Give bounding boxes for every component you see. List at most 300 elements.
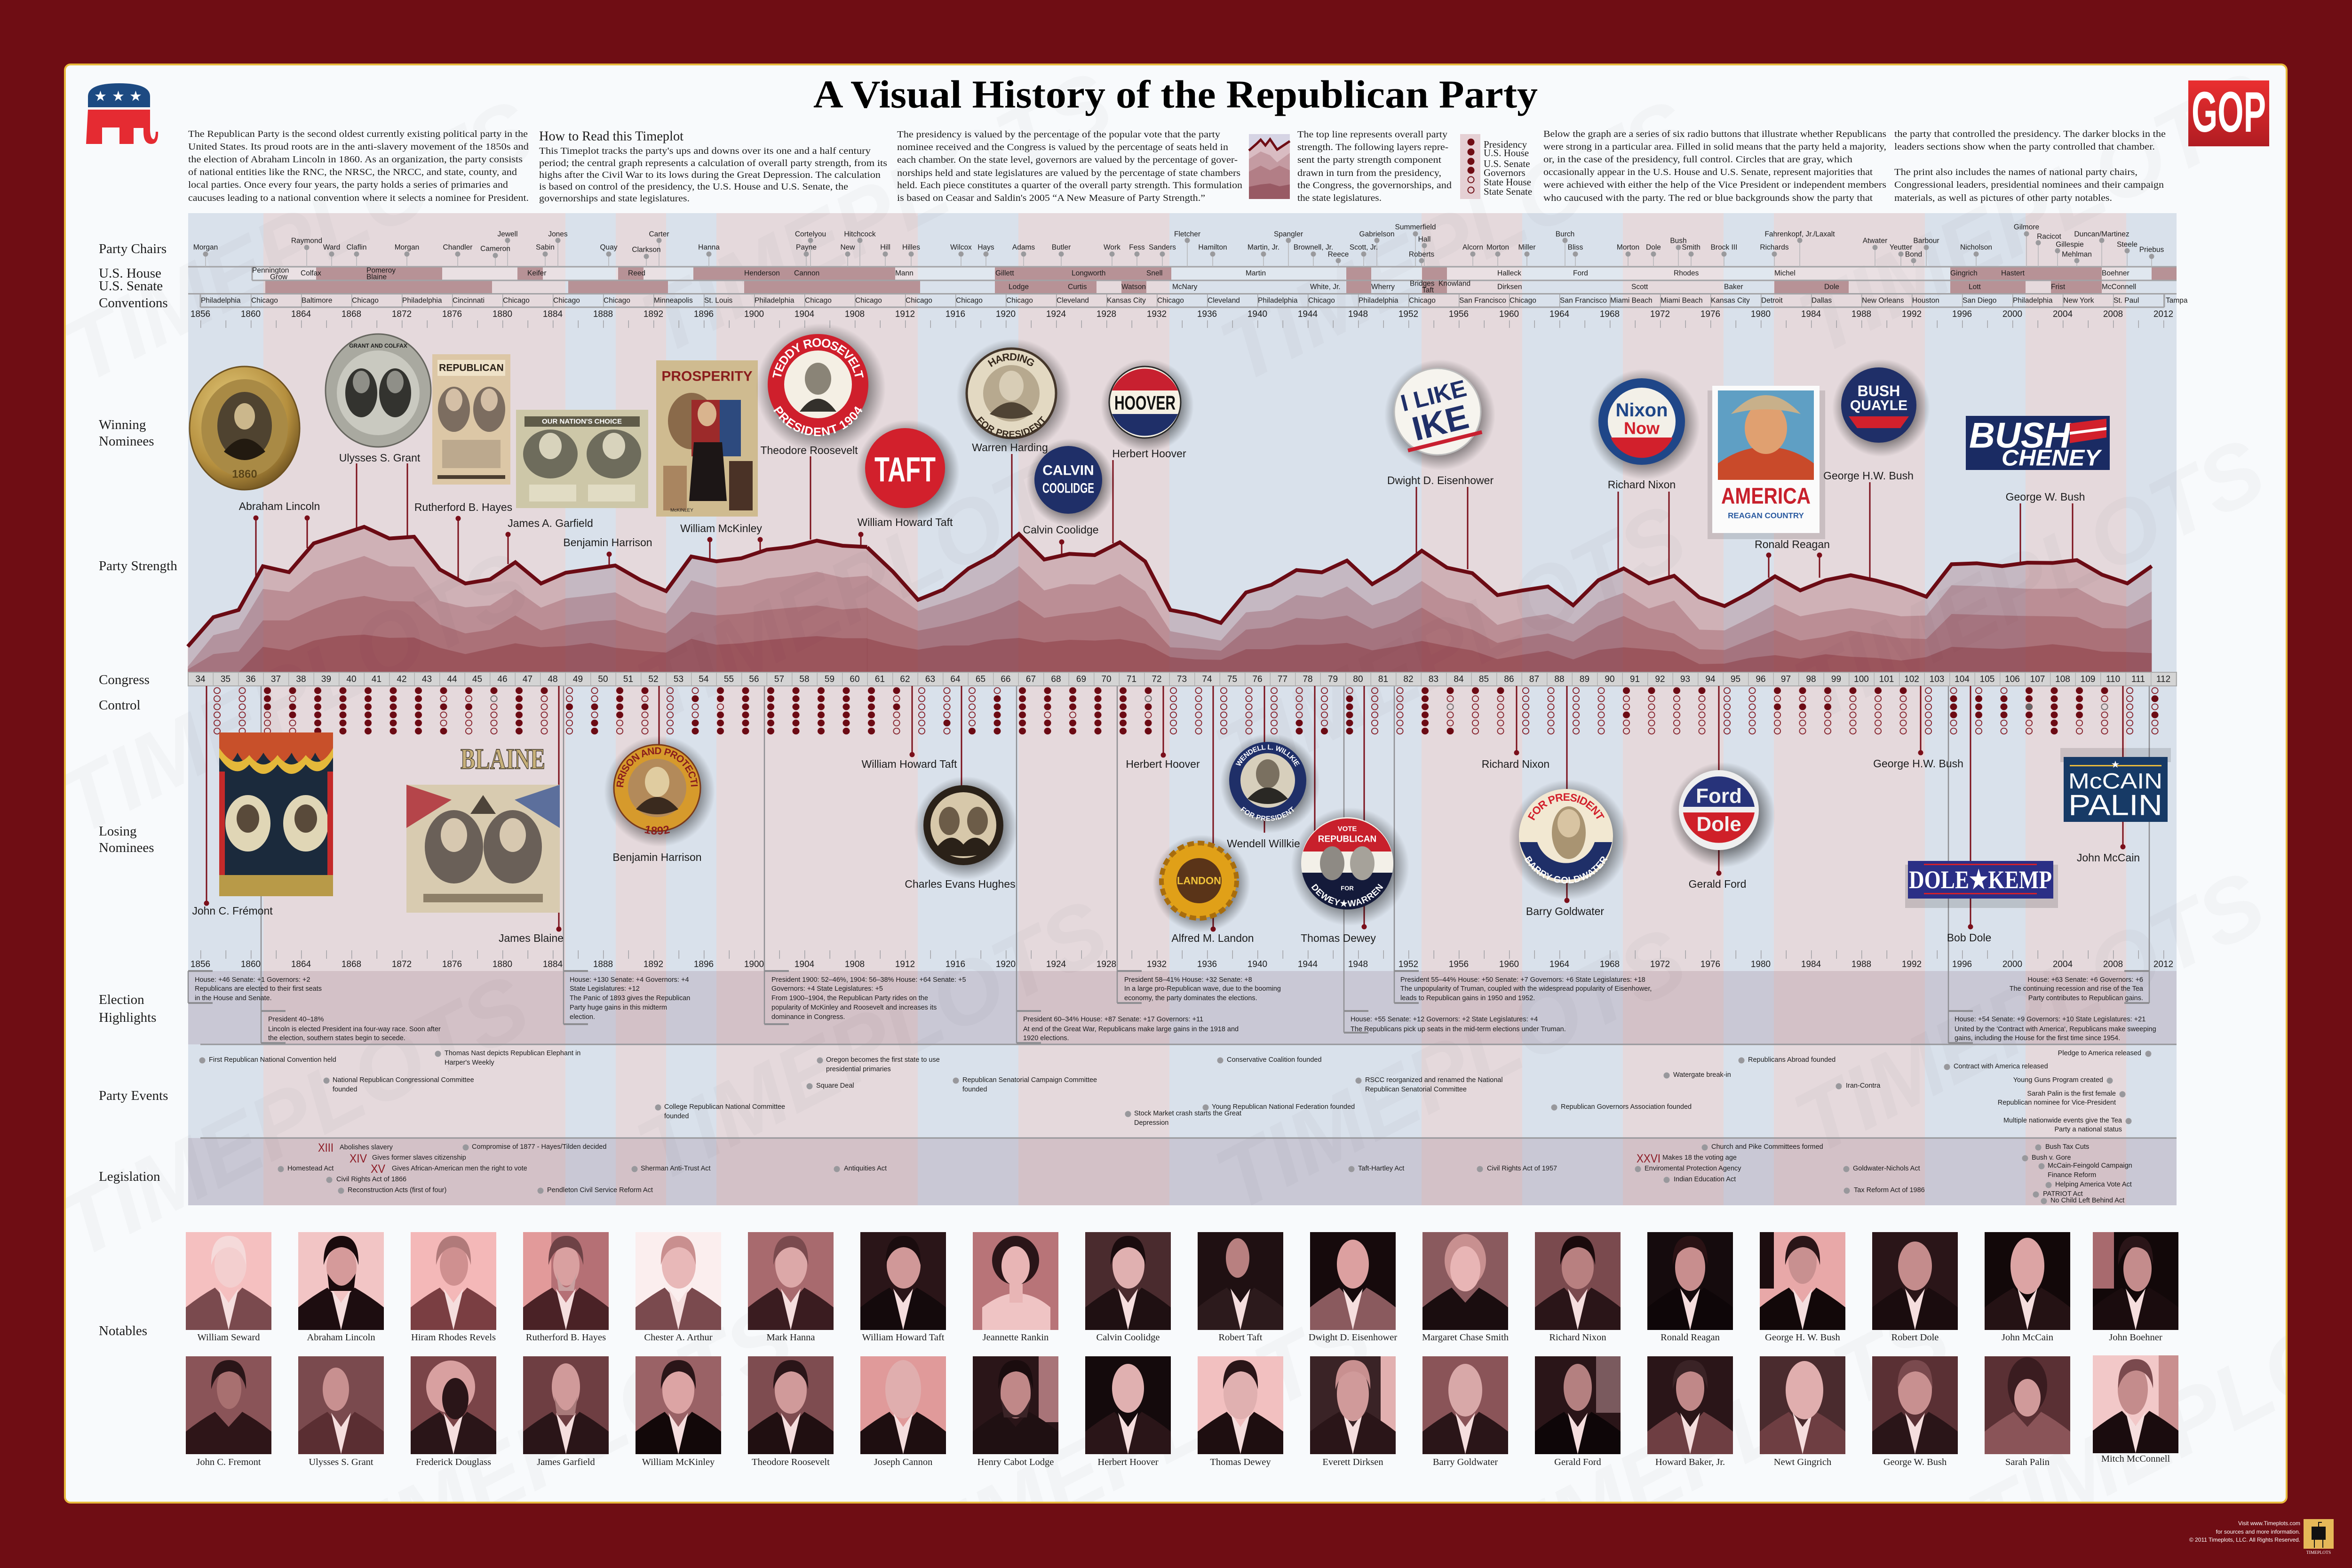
notable: James Garfield bbox=[523, 1356, 609, 1467]
election highlights text: President 55–44% House: +50 Senate: +7 Governors: +6 State Legislatures: +18 bbox=[1400, 976, 1645, 984]
bottom year axis: 1968 bbox=[1600, 960, 1620, 969]
notable: Sarah Palin bbox=[1985, 1356, 2070, 1467]
Bush Cheney banner bbox=[1966, 416, 2110, 470]
legislation text: XIV bbox=[350, 1152, 367, 1165]
party chairs names bbox=[193, 223, 2164, 259]
label: Hoover: Herbert Hoover bbox=[1112, 447, 1186, 460]
notable: Mark Hanna: Mark Hanna bbox=[766, 1332, 815, 1343]
Bush Cheney banner: BUSH bbox=[1969, 416, 2071, 455]
text block: radio buttons: were strong in a particular area. Filled in solid means that the party held a majority, bbox=[1543, 142, 1886, 152]
election highlights text: House: +55 Senate: +12 Governors: +2 State Legislatures: +4 bbox=[1351, 1016, 1538, 1023]
text block: backgrounds and print: leaders sections show when the party controlled that chamber. bbox=[1894, 142, 2155, 152]
Bush Quayle button bbox=[1832, 359, 1930, 457]
bottom year axis: 1912 bbox=[895, 960, 915, 969]
legislation text: Antiquities Act bbox=[844, 1165, 887, 1172]
party chairs names: Work bbox=[1104, 244, 1120, 251]
house and senate leader names: Ford bbox=[1573, 269, 1588, 278]
house and senate leader names: Pennington bbox=[252, 266, 289, 275]
losing nominee stems bbox=[207, 686, 2123, 929]
convention cities: Philadelphia bbox=[2013, 296, 2053, 305]
congress number strip: 86 bbox=[1504, 675, 1514, 684]
convention cities: San Francisco bbox=[1560, 296, 1607, 305]
Landon sunflower bbox=[1152, 835, 1250, 932]
election highlights text: United by the 'Contract with America', Republicans make sweeping bbox=[1955, 1026, 2156, 1033]
notable: George W. Bush: George W. Bush bbox=[1883, 1457, 1947, 1467]
legend: radio buttons: Presidency bbox=[1484, 139, 1527, 150]
notable: Joseph Cannon bbox=[860, 1356, 946, 1467]
convention cities: Cleveland bbox=[1208, 296, 1240, 305]
congress number strip: 92 bbox=[1655, 675, 1665, 684]
label: Nixon: Richard Nixon bbox=[1608, 478, 1676, 491]
text block: backgrounds and print: the party that controlled the presidency. The darker blocks in the bbox=[1894, 129, 2166, 139]
bottom year axis: 1932 bbox=[1147, 960, 1167, 969]
party chairs dots bbox=[206, 234, 2152, 261]
notable: Jeannette Rankin bbox=[973, 1232, 1058, 1343]
election highlights text: gains, including the House for the first time since 1954. bbox=[1955, 1035, 2120, 1042]
congress number strip: 111 bbox=[2131, 675, 2145, 684]
legislation text: Tax Reform Act of 1986 bbox=[1854, 1186, 1925, 1194]
label: Garfield: James A. Garfield bbox=[508, 517, 593, 529]
row labels: Legislation bbox=[99, 1169, 160, 1184]
congress number strip: 85 bbox=[1479, 675, 1489, 684]
congress number strip: 105 bbox=[1980, 675, 1994, 684]
party chairs names: Hilles bbox=[902, 244, 920, 251]
Blaine logo: BLAINE bbox=[461, 743, 545, 775]
convention cities: St. Paul bbox=[2114, 296, 2139, 305]
label: Dole: Bob Dole bbox=[1947, 931, 1991, 944]
notable: Calvin Coolidge bbox=[1085, 1232, 1171, 1343]
party events text: Party a national status bbox=[2055, 1126, 2122, 1133]
party chairs names: Roberts bbox=[1409, 250, 1434, 259]
notable: Chester A. Arthur: Chester A. Arthur bbox=[644, 1332, 713, 1343]
election highlights text: From 1900–1904, the Republican Party rides on the bbox=[771, 995, 928, 1002]
Nixon button bbox=[1589, 369, 1700, 480]
notable: James Garfield: James Garfield bbox=[537, 1457, 595, 1467]
notable: Chester A. Arthur bbox=[636, 1232, 721, 1343]
icon: GOP logo bbox=[2188, 80, 2269, 146]
congress number strip: 90 bbox=[1605, 675, 1615, 684]
congress number strip: 62 bbox=[900, 675, 910, 684]
congress number strip: 67 bbox=[1026, 675, 1036, 684]
label: Ford: Gerald Ford bbox=[1689, 878, 1746, 890]
house and senate leader names: Lott bbox=[1969, 283, 1981, 291]
convention cities: Chicago bbox=[251, 296, 278, 305]
convention cities: New York bbox=[2063, 296, 2094, 305]
party chairs names: Mehlman bbox=[2062, 250, 2092, 259]
election highlights text: President 58–41% House: +32 Senate: +8 bbox=[1124, 976, 1252, 984]
bottom year axis: 1996 bbox=[1952, 960, 1972, 969]
election highlights text: The unpopularity of Truman, coupled with the widespread popularity of Eisenhower, bbox=[1400, 985, 1652, 993]
bottom year axis: 1872 bbox=[392, 960, 412, 969]
congress control radio buttons bbox=[214, 688, 2158, 734]
row labels: Election bbox=[99, 992, 144, 1007]
bottom year axis: 1888 bbox=[593, 960, 613, 969]
congress number strip: 87 bbox=[1529, 675, 1539, 684]
congress number strip: 110 bbox=[2106, 675, 2120, 684]
congress number strip: 70 bbox=[1101, 675, 1112, 684]
icon: republican elephant logo bbox=[86, 83, 158, 144]
bottom year axis bbox=[191, 955, 2173, 969]
party chairs names: Fletcher bbox=[1174, 231, 1200, 238]
Eisenhower button bbox=[1384, 359, 1495, 470]
election highlights text: in the House and Senate. bbox=[195, 995, 272, 1002]
top year axis bbox=[191, 310, 2173, 324]
text block: how to read: highs after the Civil War to its lows during the Great Depression. The calculation bbox=[539, 170, 881, 180]
footer credit bbox=[2189, 1520, 2300, 1543]
Dewey button: VOTE bbox=[1338, 825, 1357, 833]
row labels: Losing bbox=[99, 824, 137, 839]
election highlights text: Governors: +4 State Legislatures: +5 bbox=[771, 985, 883, 993]
top year axis: 1876 bbox=[442, 310, 462, 319]
text block: introduction: of national entities like the RNC, the NRSC, the NRCC, and state, county, and bbox=[188, 167, 517, 177]
notable: Howard Baker, Jr. bbox=[1647, 1356, 1733, 1467]
house and senate leader names: Keifer bbox=[527, 269, 547, 278]
legislation text: Finance Reform bbox=[2048, 1171, 2096, 1179]
party chairs names: Adams bbox=[1012, 244, 1035, 251]
text block: backgrounds and print bbox=[1894, 129, 2166, 203]
bottom year axis: 2008 bbox=[2103, 960, 2123, 969]
icon: GOP logo: GOP bbox=[2192, 80, 2266, 144]
top year axis: 1892 bbox=[644, 310, 663, 319]
congress number strip: 37 bbox=[271, 675, 281, 684]
top year axis: 1904 bbox=[795, 310, 815, 319]
Willkie button: WENDELL L. WILLKIE bbox=[1234, 743, 1301, 768]
Hoover button bbox=[1101, 359, 1194, 452]
party chairs names: Brock III bbox=[1711, 244, 1737, 251]
party chairs names: Morton bbox=[1486, 244, 1509, 251]
convention cities: St. Louis bbox=[704, 296, 733, 305]
label: McCain: John McCain bbox=[2077, 852, 2140, 864]
Dewey button: DEWEY★WARREN bbox=[1309, 882, 1385, 909]
congress number strip: 97 bbox=[1781, 675, 1791, 684]
row labels: Nominees bbox=[99, 434, 154, 449]
top year axis: 1972 bbox=[1650, 310, 1670, 319]
congress number strip: 45 bbox=[472, 675, 482, 684]
notable: Ronald Reagan: Ronald Reagan bbox=[1661, 1332, 1720, 1343]
notable: Herbert Hoover bbox=[1085, 1356, 1171, 1467]
Hughes button bbox=[914, 776, 1017, 880]
McCain Palin banner: PALIN bbox=[2068, 789, 2162, 821]
Ford Dole button: Ford bbox=[1696, 785, 1742, 807]
congress number strip: 39 bbox=[321, 675, 331, 684]
congress number strip: 65 bbox=[976, 675, 985, 684]
convention cities: Miami Beach bbox=[1610, 296, 1653, 305]
notable: John McCain bbox=[1985, 1232, 2070, 1343]
party events text: Harper's Weekly bbox=[445, 1059, 494, 1067]
party chairs stems bbox=[206, 234, 2152, 267]
row labels: U.S. Senate bbox=[99, 279, 163, 294]
house and senate leader names: Dirksen bbox=[1497, 283, 1522, 291]
legislation text: Makes 18 the voting age bbox=[1662, 1154, 1737, 1162]
party chairs names: Brownell, Jr. bbox=[1294, 244, 1333, 251]
party events text: Contract with America released bbox=[1954, 1063, 2048, 1070]
congress number strip: 72 bbox=[1152, 675, 1162, 684]
party chairs names: Priebus bbox=[2139, 246, 2164, 254]
congress number strip: 77 bbox=[1278, 675, 1287, 684]
text block: how to read: period; the central graph represents a calculation of overall party strength, from its bbox=[539, 158, 887, 168]
label: G.W. Bush: George W. Bush bbox=[2006, 491, 2085, 503]
bottom year axis: 1948 bbox=[1348, 960, 1368, 969]
notable: William Seward: William Seward bbox=[198, 1332, 260, 1343]
house and senate leader names: McConnell bbox=[2102, 283, 2136, 291]
top year axis: 1944 bbox=[1298, 310, 1318, 319]
notable: Everett Dirksen: Everett Dirksen bbox=[1322, 1457, 1383, 1467]
party events text: National Republican Congressional Committee bbox=[333, 1076, 474, 1084]
McKinley poster bbox=[656, 360, 758, 517]
label: Reagan: Ronald Reagan bbox=[1755, 538, 1830, 550]
Coolidge button bbox=[1026, 438, 1115, 527]
icon: republican elephant logo: ★ bbox=[112, 88, 125, 104]
McKinley poster: PROSPERITY bbox=[661, 369, 753, 384]
row labels: Notables bbox=[99, 1323, 147, 1338]
text block: layers: the state legislatures. bbox=[1297, 193, 1382, 203]
Goldwater button bbox=[1509, 780, 1629, 900]
bottom year axis: 1972 bbox=[1650, 960, 1670, 969]
label: Roosevelt: Theodore Roosevelt bbox=[760, 444, 858, 456]
Dewey button: FOR bbox=[1341, 884, 1354, 892]
Garfield poster bbox=[516, 410, 648, 508]
party chairs names: Barbour bbox=[1913, 237, 1939, 245]
congress number strip: 104 bbox=[1955, 675, 1970, 684]
convention cities: Dallas bbox=[1812, 296, 1832, 305]
party events text: Conservative Coalition founded bbox=[1227, 1056, 1322, 1064]
top year axis: 1968 bbox=[1600, 310, 1620, 319]
Goldwater button: FOR PRESIDENT bbox=[1526, 791, 1606, 822]
house and senate leader names: Mann bbox=[895, 269, 914, 278]
congress number strip: 109 bbox=[2081, 675, 2095, 684]
party events text: Square Deal bbox=[816, 1082, 854, 1090]
text block: valuation: each chamber. On the state level, governors are valued by the percentage of gover- bbox=[897, 155, 1238, 165]
bottom year axis: 1956 bbox=[1449, 960, 1469, 969]
gray election highlight brackets bbox=[188, 686, 2149, 1043]
convention cities: Miami Beach bbox=[1661, 296, 1703, 305]
convention cities: Kansas City bbox=[1711, 296, 1750, 305]
top year axis: 1984 bbox=[1801, 310, 1821, 319]
party chairs names: Burch bbox=[1556, 231, 1574, 238]
label: Hayes: Rutherford B. Hayes bbox=[414, 501, 512, 513]
convention cities: Cincinnati bbox=[453, 296, 485, 305]
Harding button: FOR PRESIDENT bbox=[974, 415, 1049, 440]
house and senate leader names: Gingrich bbox=[1950, 269, 1978, 278]
party chairs names: Hill bbox=[880, 244, 890, 251]
bottom year axis: 1980 bbox=[1751, 960, 1771, 969]
legislation text: XIII bbox=[318, 1141, 334, 1154]
party chairs names: Jones bbox=[548, 231, 568, 238]
election highlights text bbox=[195, 976, 2156, 1042]
congress number strip: 82 bbox=[1403, 675, 1414, 684]
party chairs names: Hanna bbox=[698, 244, 720, 251]
icon: Timeplots logo bbox=[2304, 1519, 2334, 1555]
legislation text: Homestead Act bbox=[287, 1165, 334, 1172]
watermark: TIMEPLOTS bbox=[1784, 53, 2285, 374]
party events text: Sarah Palin is the first female bbox=[2027, 1090, 2116, 1098]
text block: radio buttons: Below the graph are a series of six radio buttons that illustrate whether Republicans bbox=[1543, 129, 1886, 139]
legislation text: Enviromental Protection Agency bbox=[1645, 1165, 1741, 1172]
legislation text: XV bbox=[371, 1162, 385, 1176]
congress number strip: 103 bbox=[1930, 675, 1944, 684]
text block: introduction: caucuses leading to a national convention where it selects a nominee for President. bbox=[188, 193, 529, 203]
congress number strip: 81 bbox=[1378, 675, 1388, 684]
election highlights text: House: +46 Senate: +1 Governors: +2 bbox=[195, 976, 310, 984]
label: Taft: William Howard Taft bbox=[858, 516, 953, 528]
convention cities: Chicago bbox=[805, 296, 832, 305]
party chairs names: Hall bbox=[1418, 235, 1430, 244]
bottom year axis: 1856 bbox=[191, 960, 210, 969]
top year axis: 1860 bbox=[241, 310, 261, 319]
Grant badge: GRANT AND COLFAX bbox=[349, 342, 407, 349]
party events text: Republican Governors Association founded bbox=[1561, 1103, 1692, 1111]
label: Fremont: John C. Frémont bbox=[192, 905, 273, 917]
top year axis: 1980 bbox=[1751, 310, 1771, 319]
Dole Kemp banner bbox=[1905, 861, 2058, 908]
legislation text: Compromise of 1877 - Hayes/Tilden decided bbox=[472, 1143, 606, 1151]
congress number strip: 51 bbox=[623, 675, 633, 684]
convention cities: Philadelphia bbox=[1258, 296, 1298, 305]
bottom year axis: 1984 bbox=[1801, 960, 1821, 969]
congress number strip: 48 bbox=[548, 675, 558, 684]
party chairs names: Smith bbox=[1682, 244, 1700, 251]
text block: backgrounds and print: The print also includes the names of national party chairs, bbox=[1894, 167, 2137, 177]
Harding button bbox=[956, 339, 1071, 454]
house and senate leader names: Grow bbox=[270, 273, 288, 281]
top year axis: 1960 bbox=[1499, 310, 1519, 319]
top year axis: 1964 bbox=[1549, 310, 1570, 319]
row divider lines bbox=[200, 1044, 2177, 1138]
heading: how to read: How to Read this Timeplot bbox=[539, 129, 683, 144]
party chairs names: Sabin bbox=[536, 244, 555, 251]
bottom year axis: 1908 bbox=[845, 960, 865, 969]
notable: Ulysses S. Grant: Ulysses S. Grant bbox=[309, 1457, 373, 1467]
bottom year axis: 1992 bbox=[1902, 960, 1922, 969]
notable: Howard Baker, Jr.: Howard Baker, Jr. bbox=[1655, 1457, 1725, 1467]
notable: William Seward bbox=[186, 1232, 271, 1343]
Eisenhower button: IKE bbox=[1408, 398, 1472, 448]
notable: Jeannette Rankin: Jeannette Rankin bbox=[983, 1332, 1049, 1343]
row labels: Control bbox=[99, 698, 141, 713]
Reagan poster: AMERICA bbox=[1721, 484, 1811, 509]
legislation text: Indian Education Act bbox=[1674, 1176, 1736, 1183]
election highlights text: At end of the Great War, Republicans make large gains in the 1918 and bbox=[1023, 1026, 1239, 1033]
party chairs names: Sanders bbox=[1149, 244, 1176, 251]
legislation text: Bush v. Gore bbox=[2032, 1154, 2071, 1162]
party chairs names: Duncan/Martinez bbox=[2074, 231, 2130, 238]
election highlights text: Party huge gains in this midterm bbox=[570, 1004, 667, 1011]
watermark: TIMEPLOTS bbox=[43, 533, 544, 853]
party chairs names: Nicholson bbox=[1960, 244, 1992, 251]
congress number strip: 54 bbox=[699, 675, 709, 684]
party chairs names: Spangler bbox=[1274, 231, 1303, 238]
election highlights text: House: +63 Senate: +6 Governors: +6 bbox=[2028, 976, 2143, 984]
Ford Dole button bbox=[1670, 762, 1775, 868]
icon: republican elephant logo: ★ bbox=[129, 88, 142, 104]
election highlights text: The Republicans pick up seats in the mid-term elections under Truman. bbox=[1351, 1026, 1566, 1033]
label: Eisenhower: Dwight D. Eisenhower bbox=[1387, 474, 1494, 486]
notable: Robert Dole: Robert Dole bbox=[1891, 1332, 1939, 1343]
bottom year axis: 1868 bbox=[342, 960, 361, 969]
election highlights text: Republicans are elected to their first seats bbox=[195, 985, 322, 993]
notable: Margaret Chase Smith bbox=[1422, 1232, 1509, 1343]
text block: backgrounds and print: materials, as well as pictures of other party notables. bbox=[1894, 193, 2112, 203]
notables row 2 bbox=[186, 1355, 2178, 1467]
congress number strip: 95 bbox=[1731, 675, 1740, 684]
notable: George H. W. Bush: George H. W. Bush bbox=[1765, 1332, 1840, 1343]
convention cities: Chicago bbox=[1510, 296, 1536, 305]
notable: Robert Taft: Robert Taft bbox=[1218, 1332, 1263, 1343]
party chairs names: Gillespie bbox=[2056, 241, 2084, 248]
party chairs names: Gilmore bbox=[2014, 223, 2039, 231]
congress number strip: 47 bbox=[523, 675, 532, 684]
election highlights text: In a large pro-Republican wave, due to the booming bbox=[1124, 985, 1281, 993]
text block: how to read: is based on control of the presidency, the U.S. House and U.S. Senate, the bbox=[539, 182, 848, 192]
top year axis: 1868 bbox=[342, 310, 361, 319]
icon: mini strength graph bbox=[1249, 134, 1290, 199]
Dole Kemp banner: DOLE★KEMP bbox=[1909, 866, 2052, 894]
congress number strip: 89 bbox=[1580, 675, 1589, 684]
notable: Barry Goldwater: Barry Goldwater bbox=[1433, 1457, 1498, 1467]
convention cities: San Diego bbox=[1963, 296, 1996, 305]
bottom year axis: 1940 bbox=[1248, 960, 1267, 969]
Lincoln coin bbox=[190, 366, 300, 490]
text block: valuation: norships held and state legislatures are valued by the percentage of state chambers bbox=[897, 168, 1240, 178]
McCain Palin banner bbox=[2060, 748, 2171, 822]
party events text: Young Guns Program created bbox=[2013, 1076, 2103, 1084]
notable: Calvin Coolidge: Calvin Coolidge bbox=[1097, 1332, 1160, 1343]
party events text: Iran-Contra bbox=[1846, 1082, 1881, 1090]
Nixon button: Nixon bbox=[1615, 400, 1668, 421]
Blaine poster bbox=[406, 785, 560, 913]
text block: layers: sent the party strength component bbox=[1297, 155, 1441, 165]
congress number strip: 106 bbox=[2005, 675, 2020, 684]
Eisenhower button: I LIKE bbox=[1398, 375, 1469, 416]
row labels: Party Strength bbox=[99, 558, 177, 573]
bottom year axis: 1896 bbox=[694, 960, 714, 969]
row labels: Highlights bbox=[99, 1010, 156, 1025]
house and senate leader names: Dole bbox=[1824, 283, 1839, 291]
top year axis: 1896 bbox=[694, 310, 714, 319]
row labels: Conventions bbox=[99, 295, 168, 310]
Theodore Roosevelt button: TEDDY ROOSEVELT bbox=[770, 335, 866, 380]
house and senate leader names: White, Jr. bbox=[1310, 283, 1341, 291]
label: Benjamin Harrison winner: Benjamin Harrison bbox=[563, 536, 652, 549]
notable: Frederick Douglass: Frederick Douglass bbox=[416, 1457, 491, 1467]
losing nominee dots bbox=[207, 753, 2123, 929]
McCain Palin banner: McCAIN bbox=[2068, 769, 2162, 793]
election highlights text: State Legislatures: +12 bbox=[570, 985, 640, 993]
party chairs names: Cortelyou bbox=[795, 231, 826, 238]
notable: Newt Gingrich bbox=[1760, 1356, 1845, 1467]
legislation text: Civil Rights Act of 1957 bbox=[1487, 1165, 1557, 1172]
bottom year axis: 1860 bbox=[241, 960, 261, 969]
convention cities: Chicago bbox=[604, 296, 630, 305]
congress number strip: 107 bbox=[2030, 675, 2045, 684]
house and senate leader names: Martin bbox=[1246, 269, 1266, 278]
Theodore Roosevelt button bbox=[756, 323, 886, 453]
party chairs names: Miller bbox=[1518, 244, 1536, 251]
house and senate leader names: Watson bbox=[1121, 283, 1146, 291]
party events text bbox=[209, 1050, 2141, 1133]
house and senate leader names: Gillett bbox=[995, 269, 1014, 278]
election highlights text: House: +130 Senate: +4 Governors: +4 bbox=[570, 976, 689, 984]
legislation text: PATRIOT Act bbox=[2043, 1190, 2083, 1198]
party events text: Multiple nationwide events give the Tea bbox=[2003, 1117, 2122, 1124]
election highlights text: Party contributes to Republican gains. bbox=[2028, 995, 2143, 1002]
legislation text: Bush Tax Cuts bbox=[2045, 1143, 2089, 1151]
top year axis: 1864 bbox=[291, 310, 311, 319]
notable: Abraham Lincoln: Abraham Lincoln bbox=[307, 1332, 375, 1343]
watermark: TIMEPLOTS bbox=[1200, 909, 1701, 1230]
house and senate leader names: Frist bbox=[2051, 283, 2066, 291]
notable: Dwight D. Eisenhower bbox=[1309, 1232, 1397, 1343]
